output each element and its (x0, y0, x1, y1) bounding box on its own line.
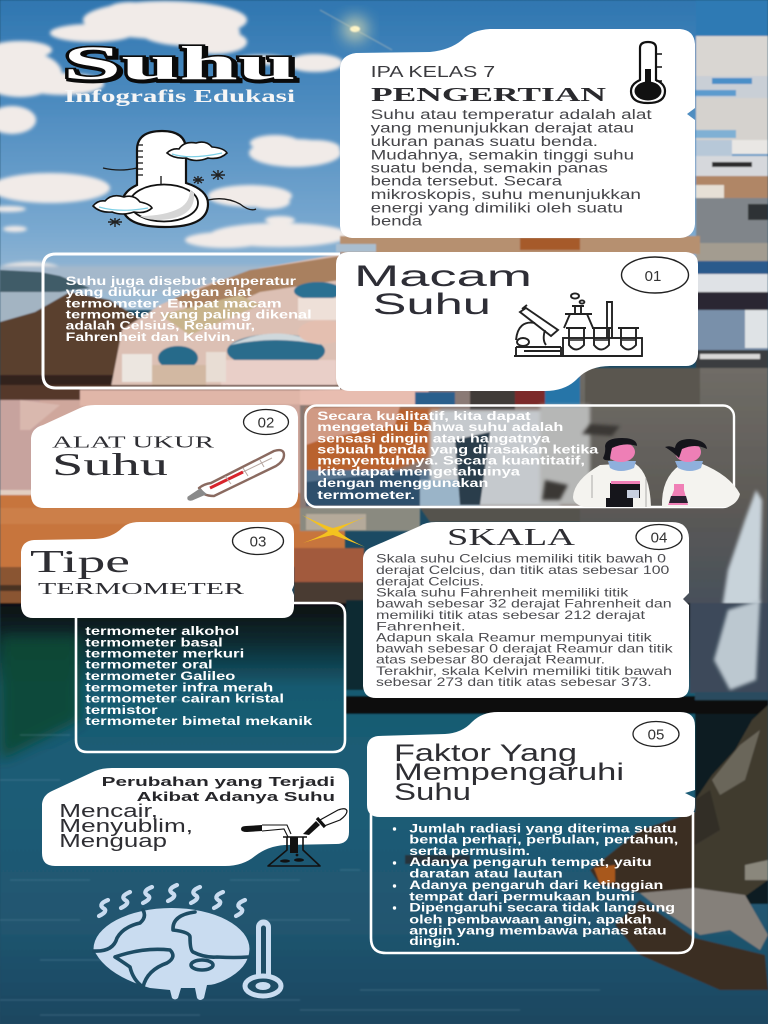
text: thermometer list: termistor (85, 703, 158, 717)
text: thermometer list: termometer merkuri (85, 647, 244, 661)
badge: 02 (244, 410, 288, 434)
badge: 01: 01 (645, 268, 661, 285)
sun glow (343, 17, 367, 41)
text: qualitative and quantitative: sebuah benda yang dirasakan ketika (317, 442, 599, 456)
badge: 03 (232, 528, 284, 554)
text: faktor list: daratan atau lautan (409, 866, 563, 880)
badge: 04 (636, 524, 682, 550)
text: qualitative and quantitative: termometer. (317, 488, 415, 502)
text: faktor list (393, 821, 678, 948)
heading: tipe termometer: Tipe (30, 543, 130, 579)
title: Suhu (63, 37, 296, 90)
heading: alat ukur suhu: Suhu (52, 446, 168, 482)
text: thermometer list: termometer bimetal mekanik (85, 714, 313, 728)
thermometer (245, 927, 281, 996)
far right sky and town column (696, 0, 768, 36)
title: Suhu (65, 39, 298, 92)
panel: perubahan (42, 768, 349, 866)
text: skala body: atas sebesar 80 derajat Reamur. (376, 653, 605, 667)
panel: skala (363, 522, 689, 698)
strip behind panels (340, 236, 700, 254)
text: qualitative and quantitative: kita dapat mengetahuinya (317, 465, 521, 479)
text: skala body: Skala suhu Fahrenheit memiliki titik (376, 585, 628, 599)
icon: thermometer (631, 42, 665, 103)
heading: pengertian: PENGERTIAN (371, 84, 606, 106)
text: faktor list: dingin. (409, 934, 460, 948)
icon: flask and pipettes (241, 809, 347, 866)
heading: IPA kelas 7: IPA KELAS 7 (371, 64, 495, 81)
heading: macam suhu (354, 260, 532, 321)
icon: thermometer with clouds (93, 131, 256, 227)
left hill and sea (0, 266, 340, 292)
text: faktor list: Jumlah radiasi yang diterima suatu (409, 821, 677, 835)
text: qualitative and quantitative: dengan menggunakan (317, 476, 488, 490)
scientist left (573, 438, 651, 507)
heading: macam suhu: Suhu (373, 288, 491, 321)
text: pengertian body: benda tersebut. Secara (371, 174, 563, 189)
text: mencair menyublim menguap: Menyublim, (59, 816, 193, 836)
text: temperature intro: Fahrenheit dan Kelvin. (66, 330, 235, 344)
terracotta lower village (0, 400, 345, 500)
text: skala body: bawah sebesar 0 derajat Reamur dan titik (376, 642, 673, 656)
text: temperature intro: Suhu juga disebut temperatur (66, 274, 297, 288)
text: qualitative and quantitative (317, 409, 599, 502)
text: skala body (376, 552, 673, 689)
heat waves (99, 885, 245, 916)
heading: macam suhu: Macam (354, 260, 532, 293)
text: faktor list: Adanya pengaruh dari ketinggian (409, 878, 663, 892)
panel outline: secara kualitatif (306, 406, 740, 507)
text: skala body: memiliki titik atas sebesar 212 derajat (376, 608, 646, 622)
text: mencair menyublim menguap: Mencair, (59, 801, 158, 821)
text: pengertian body: energi yang dimiliki oleh suatu (371, 200, 623, 215)
heading: alat ukur suhu (52, 432, 215, 482)
panel: pengertian (340, 29, 695, 238)
heading: perubahan akibat suhu (102, 774, 335, 804)
badge: 01 (622, 257, 688, 293)
text: faktor list: benda perhari, perbulan, pertahun, (409, 832, 678, 846)
text: thermometer list: termometer basal (85, 635, 223, 649)
badge: 05 (633, 722, 679, 746)
text: thermometer list: termometer Galileo (85, 669, 235, 683)
panel: faktor (367, 712, 695, 953)
text: qualitative and quantitative: menyentuhnya. Secara kuantitatif, (317, 454, 585, 468)
title (63, 37, 298, 106)
heading: skala: SKALA (447, 525, 576, 551)
text: mencair menyublim menguap: Menguap (59, 831, 167, 851)
text: temperature intro: termometer yang paling dikenal (66, 308, 312, 322)
text: temperature intro (66, 274, 312, 344)
icon: yellow star (302, 515, 365, 547)
text: temperature intro: termometer. Empat macam (66, 296, 282, 310)
title: Infografis Edukasi (64, 86, 295, 106)
text: faktor list: Adanya pengaruh tempat, yaitu (409, 855, 652, 869)
text: skala body: derajat Celcius. (376, 574, 484, 588)
panel outline: suhu juga disebut (43, 254, 340, 388)
text: pengertian body: benda (371, 214, 423, 229)
panel: alat ukur (31, 405, 298, 508)
icon: melting earth with heat and thermometer (94, 885, 281, 1000)
text: pengertian body (371, 107, 652, 229)
sea (0, 603, 768, 1024)
text: skala body: Adapun skala Reamur mempunyai titik (376, 630, 652, 644)
heading: faktor yang mempengaruhi suhu: Faktor Yang (394, 740, 577, 767)
text: pengertian body: Suhu atau temperatur adalah alat (371, 107, 652, 122)
text: skala body: Terakhir, skala Kelvin memiliki titik bawah (376, 664, 672, 678)
text: skala body: derajat Celcius, dan titik atas sebesar 100 (376, 563, 670, 577)
globe (94, 908, 250, 1000)
text: pengertian body: mikroskopis, suhu menunjukkan (371, 187, 641, 202)
heading: alat ukur suhu: ALAT UKUR (52, 432, 215, 452)
text: skala body: Skala suhu Celcius memiliki titik bawah 0 (376, 552, 667, 566)
text: faktor list: Dipengaruhi secara tidak langsung (409, 901, 675, 915)
text: qualitative and quantitative: sensasi dingin atau hangatnya (317, 431, 551, 445)
text: temperature intro: yang diukur dengan alat (66, 285, 252, 299)
text: faktor list: serta permusim. (409, 844, 530, 858)
icon: laboratory equipment (514, 293, 642, 356)
heading: faktor yang mempengaruhi suhu: Mempengaruhi (394, 759, 624, 786)
text: faktor list: oleh pembawaan angin, apakah (409, 912, 652, 926)
text: skala body: bawah sebesar 32 derajat Fahrenheit dan (376, 597, 672, 611)
text: pengertian body: yang menunjukkan derajat atau (371, 121, 634, 136)
text: pengertian body: Mudahnya, semakin tinggi suhu (371, 147, 634, 162)
badge: 03: 03 (250, 534, 266, 550)
text: mencair menyublim menguap (59, 801, 193, 851)
panel: tipe termometer (21, 522, 294, 618)
heading: tipe termometer: TERMOMETER (38, 579, 245, 598)
heading: faktor yang mempengaruhi suhu (394, 740, 624, 806)
text: thermometer list: termometer oral (85, 658, 213, 672)
heading: faktor yang mempengaruhi suhu: Suhu (394, 779, 471, 806)
heading: perubahan akibat suhu: Akibat Adanya Suhu (137, 789, 335, 804)
village (110, 254, 340, 392)
badge: 04: 04 (651, 530, 667, 546)
lower right rock (695, 714, 768, 904)
panel: macam suhu (336, 252, 698, 391)
scientist right (662, 439, 740, 507)
list panel: thermometer types (76, 603, 345, 752)
text: qualitative and quantitative: Secara kualitatif, kita dapat (317, 409, 531, 423)
text: temperature intro: adalah Celsius, Reaumur, (66, 319, 255, 333)
text: skala body: sebesar 273 dan titik atas sebesar 373. (376, 675, 652, 689)
text: thermometer list: termometer alkohol (85, 624, 239, 638)
text: skala body: Fahrenheit. (376, 619, 466, 633)
heading: perubahan akibat suhu: Perubahan yang Terjadi (102, 774, 335, 789)
text: thermometer list: termometer cairan kristal (85, 692, 284, 706)
icon: clinical thermometer (188, 450, 284, 500)
text: qualitative and quantitative: mengetahui bahwa suhu adalah (317, 420, 563, 434)
list outline (371, 812, 693, 953)
central buildings and cliff (300, 388, 590, 508)
illustration: two scientists (573, 438, 740, 507)
text: faktor list: angin yang membawa panas atau (409, 923, 667, 937)
text: thermometer list (85, 624, 313, 728)
badge: 02: 02 (258, 414, 274, 432)
text: faktor list: tempat dari permukaan bumi (409, 889, 635, 903)
text: pengertian body: ukuran panas suatu benda. (371, 134, 598, 149)
heading: tipe termometer (30, 543, 245, 598)
badge: 05: 05 (648, 726, 664, 744)
text: thermometer list: termometer infra merah (85, 680, 273, 694)
text: pengertian body: suatu benda, semakin panas (371, 161, 608, 176)
